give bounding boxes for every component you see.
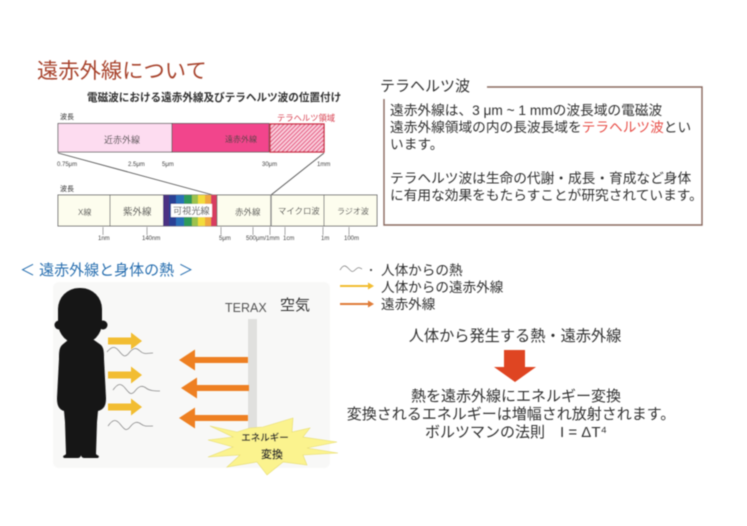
explanation text: 熱を遠赤外線にエネルギー変換	[411, 388, 621, 405]
explanation text: 変換されるエネルギーは増幅され放射されます。	[347, 406, 675, 423]
icon: person silhouette	[54, 288, 108, 458]
heading: heat and far infrared from body: 人体から発生する熱・遠赤外線	[409, 328, 621, 345]
legend: body heat: 人体からの熱	[381, 263, 463, 278]
upper wavelength bar: 5μm	[162, 162, 174, 168]
upper wavelength bar: 近赤外線	[104, 134, 140, 145]
panel text: テラヘルツ波は生命の代謝・成長・育成など身体	[390, 171, 691, 186]
lower wavelength bar: 500μm/1mm	[246, 236, 279, 242]
yellow arrows	[108, 332, 142, 416]
upper wavelength bar: テラヘルツ領域	[277, 113, 335, 123]
lower wavelength bar: 140nm	[142, 236, 160, 242]
energy conversion burst: 変換	[261, 447, 283, 461]
spectrum chart	[57, 91, 377, 242]
legend: far infrared from body: 人体からの遠赤外線	[381, 280, 504, 295]
legend: far infrared: 遠赤外線	[381, 297, 436, 312]
lower wavelength bar: 波長	[60, 184, 74, 193]
panel: terahertz wave	[380, 78, 703, 225]
lower wavelength bar: 紫外線	[123, 206, 152, 218]
diagram: body heat	[53, 282, 338, 475]
lower wavelength bar: 可視光線	[173, 205, 210, 216]
diagram background	[53, 282, 330, 468]
lower wavelength bar: ラジオ波	[337, 206, 369, 216]
lower wavelength bar: 1m	[321, 236, 329, 242]
heat wave arrows	[107, 347, 160, 430]
panel frame	[384, 87, 702, 225]
panel heading: テラヘルツ波	[380, 78, 470, 95]
panel text: 遠赤外線は、3 μm ~ 1 mmの波長域の電磁波	[390, 103, 662, 118]
explanation text	[347, 388, 675, 441]
panel text: います。	[390, 137, 443, 152]
energy conversion burst	[208, 418, 338, 475]
upper wavelength bar: 遠赤外線	[225, 134, 257, 144]
explanation text: ボルツマンの法則 I = ΔT⁴	[425, 424, 607, 441]
legend: far infrared	[340, 297, 436, 312]
upper wavelength bar: 2.5μm	[128, 162, 145, 168]
upper wavelength bar: 波長	[60, 112, 74, 121]
lower wavelength bar: 1nm	[98, 236, 110, 242]
upper wavelength bar	[57, 112, 335, 168]
lower wavelength bar	[58, 184, 377, 242]
TERAX panel	[248, 319, 257, 429]
upper wavelength bar: 0.75μm	[57, 162, 77, 168]
lower wavelength bar: 100m	[344, 236, 359, 242]
explanation	[347, 328, 675, 441]
lower wavelength bar: 1cm	[283, 236, 294, 242]
legend	[340, 263, 504, 312]
panel text: に有用な効果をもたらすことが研究されています。	[390, 187, 703, 203]
chart heading: 電磁波における遠赤外線及びテラヘルツ波の位置付け	[87, 91, 341, 104]
legend: body heat	[340, 263, 463, 278]
title: 遠赤外線について	[37, 59, 207, 83]
lower wavelength bar: X線	[78, 207, 91, 217]
air label: 空気	[280, 297, 310, 314]
lower wavelength bar: マイクロ波	[278, 206, 320, 216]
lower wavelength bar: 5μm	[219, 236, 231, 242]
panel text	[390, 103, 703, 203]
lower wavelength bar: 赤外線	[235, 207, 261, 217]
orange arrows	[179, 350, 249, 428]
energy conversion burst: エネルギー	[241, 432, 289, 444]
TERAX label: TERAX	[225, 301, 267, 315]
icon: red down arrow	[494, 350, 536, 382]
panel text: 遠赤外線領域の内の長波長域をテラヘルツ波とい	[390, 120, 691, 135]
section heading: ＜ 遠赤外線と身体の熱 ＞	[20, 262, 193, 279]
upper wavelength bar: 1mm	[317, 162, 330, 168]
zoom connector lines	[58, 153, 324, 195]
upper wavelength bar: 30μm	[262, 162, 277, 168]
